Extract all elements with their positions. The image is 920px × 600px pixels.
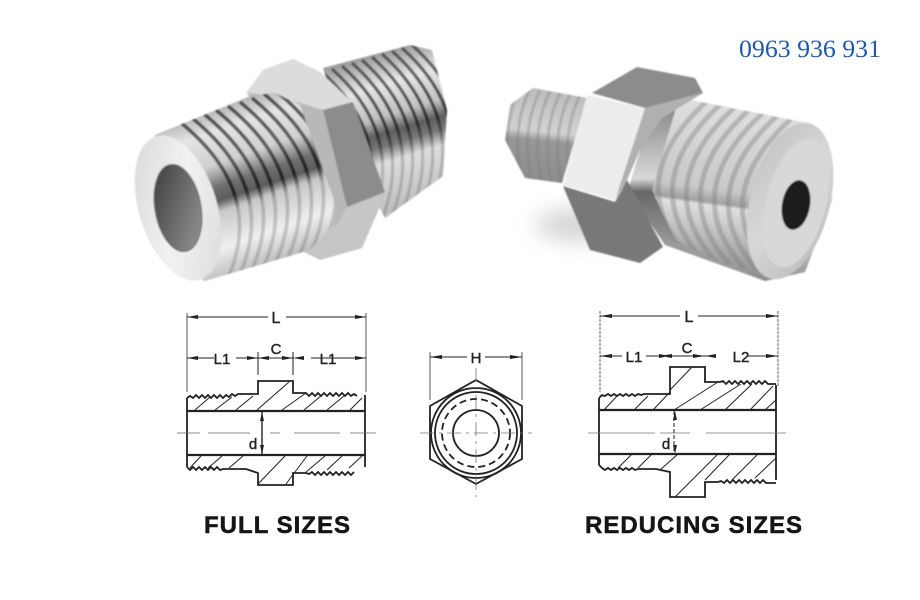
end face and bore <box>119 125 237 291</box>
hexagon <box>430 380 522 484</box>
dimension L1, C, L2: C <box>682 340 693 357</box>
end face and bore <box>732 114 848 288</box>
phone number: 0963 936 931 <box>739 36 881 63</box>
dimension d: d <box>662 436 670 453</box>
dimension L1, C, L2 <box>600 340 778 366</box>
dimension L1, C, L1: C <box>271 341 282 358</box>
dimension L1, C, L2: L1 <box>626 349 642 366</box>
dimension L: L <box>685 309 694 326</box>
near thread section <box>150 91 336 286</box>
section outline <box>177 381 376 485</box>
dimension H: H <box>471 350 481 367</box>
drawing: reducing sizes section <box>588 309 786 497</box>
soft shadow <box>535 209 625 241</box>
dimension L1, C, L1: L1 <box>320 351 336 368</box>
drawing: full sizes section <box>177 310 376 485</box>
far thread section <box>322 44 448 218</box>
small thread <box>505 88 587 187</box>
dimension H <box>430 350 522 400</box>
dimension d <box>249 412 264 454</box>
section outline <box>588 367 786 497</box>
hex nut <box>563 67 703 263</box>
large thread <box>628 100 832 281</box>
dimension L1, C, L1 <box>187 341 366 375</box>
photo: reducing size hex nipple <box>505 67 848 288</box>
caption: reducing sizes: REDUCING SIZES <box>585 512 802 539</box>
dimension L1, C, L2: L2 <box>733 349 749 366</box>
dimension L <box>600 309 778 392</box>
photo: full size hex nipple <box>134 44 448 282</box>
drawing: hex end view <box>420 350 532 497</box>
dimension L: L <box>272 310 281 327</box>
concentric circles <box>431 388 521 478</box>
infographic canvas <box>134 40 880 534</box>
dimension d: d <box>249 436 257 453</box>
hex collar <box>247 59 385 260</box>
dimension L1, C, L1: L1 <box>214 351 230 368</box>
dimension L <box>187 310 366 392</box>
caption: full sizes: FULL SIZES <box>204 512 350 539</box>
dimension d <box>662 411 677 454</box>
